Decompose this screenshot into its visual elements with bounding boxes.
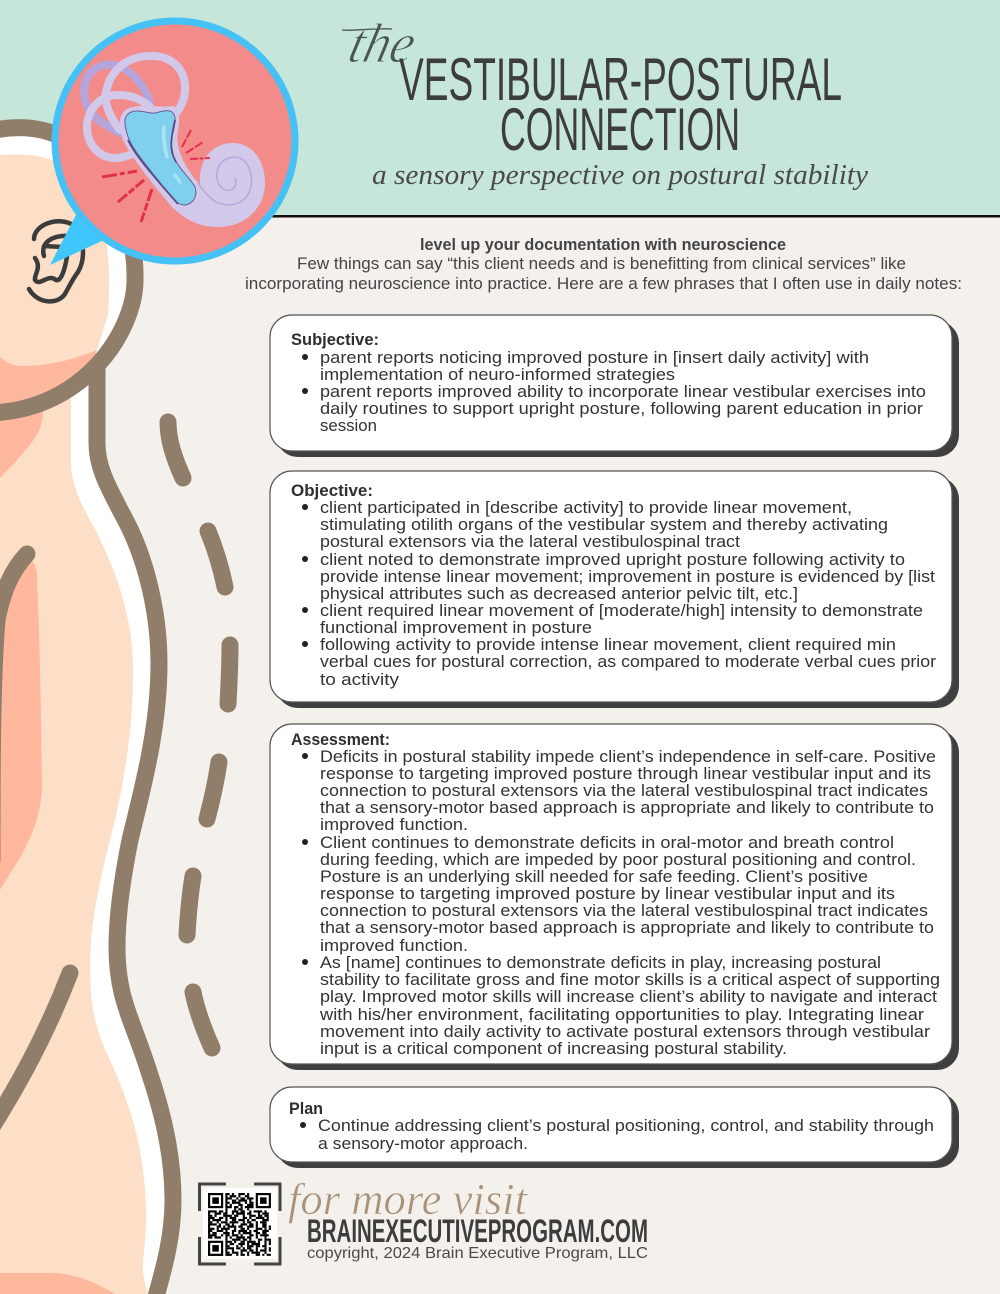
card [270, 724, 959, 1070]
QR code with bracket frame [200, 1184, 280, 1264]
vestibule fluid [125, 111, 196, 205]
panel: plan [270, 1087, 959, 1168]
panel: subjective [270, 315, 959, 457]
assessment bullets: Client continues to demonstrate deficits in oral-motor and breath control [320, 834, 894, 852]
plan heading: Plan [289, 1099, 323, 1118]
intro text: Few things can say “this client needs and is benefitting from clinical services” like [297, 254, 906, 273]
assessment bullets: connection to postural extensors via the lateral vestibulospinal tract indicates [320, 782, 928, 800]
plan bullet: a sensory-motor approach. [318, 1135, 528, 1153]
frame brackets [200, 1184, 280, 1264]
assessment bullets: As [name] continues to demonstrate deficits in play, increasing postural [320, 954, 881, 972]
title: script word the: the [343, 13, 422, 75]
torso contour line [97, 366, 173, 1294]
assessment bullets: response to targeting improved posture through linear vestibular input and its [320, 765, 931, 783]
copyright: copyright, 2024 Brain Executive Program, LLC [307, 1245, 648, 1262]
title: CONNECTION [500, 96, 740, 163]
assessment bullets [302, 748, 940, 1058]
objective bullets: following activity to provide intense linear movement, client required min [320, 636, 896, 654]
plan bullet: Continue addressing client’s postural positioning, control, and stability through [318, 1117, 934, 1135]
subjective bullets [302, 349, 926, 435]
body figure illustration [0, 128, 173, 1294]
objective bullets: client participated in [describe activity] to provide linear movement, [320, 499, 852, 517]
arm line [0, 554, 27, 860]
objective bullets: provide intense linear movement; improvement in posture is evidenced by [list [320, 568, 935, 586]
dashed spine line [168, 422, 230, 1048]
assessment bullets: input is a critical component of increasing postural stability. [320, 1040, 787, 1058]
assessment bullets: that a sensory-motor based approach is appropriate and likely to contribute to [320, 799, 934, 817]
objective heading: Objective: [291, 481, 373, 500]
subjective bullets: daily routines to support upright posture, following parent education in prior [320, 400, 924, 418]
assessment bullets: improved function. [320, 816, 468, 834]
objective bullets: to activity [320, 671, 400, 689]
panel: assessment [270, 724, 959, 1070]
website: BRAINEXECUTIVEPROGRAM.COM [307, 1213, 648, 1249]
subjective bullets: implementation of neuro-informed strategies [320, 366, 675, 384]
cochlea spiral [198, 157, 252, 205]
inner ear callout bubble [50, 21, 295, 265]
subjective bullets: session [320, 417, 377, 435]
torso skin [0, 390, 148, 1294]
objective bullets: client noted to demonstrate improved upright posture following activity to [320, 551, 905, 569]
assessment bullets: improved function. [320, 937, 468, 955]
intro text: level up your documentation with neuroscience [420, 235, 786, 254]
card [270, 1087, 959, 1168]
footer script: for more visit: for more visit [288, 1175, 529, 1224]
icon: ear [29, 221, 83, 301]
assessment heading: Assessment: [291, 730, 390, 749]
fluid highlight [164, 127, 180, 182]
subjective bullets: parent reports improved ability to incorporate linear vestibular exercises into [320, 383, 926, 401]
card [270, 315, 959, 457]
head skin [0, 154, 109, 400]
subjective bullets: parent reports noticing improved posture in [insert daily activity] with [320, 349, 869, 367]
red signal dashes [102, 130, 210, 222]
objective bullets: postural extensors via the lateral vestibulospinal tract [320, 533, 740, 551]
head outline [0, 128, 135, 413]
objective bullets [302, 499, 937, 689]
cochlea and vestibule [120, 106, 265, 227]
intro text [245, 235, 962, 293]
objective bullets: stimulating otilith organs of the vestibular system and thereby activating [320, 516, 888, 534]
subtitle: a sensory perspective on postural stability [372, 160, 869, 191]
panel: objective [270, 471, 959, 708]
objective bullets: physical attributes such as decreased anterior pelvic tilt, etc.] [320, 585, 798, 603]
objective bullets: verbal cues for postural correction, as compared to moderate verbal cues prior [320, 653, 937, 671]
assessment bullets: Posture is an underlying skill needed for safe feeding. Client’s positive [320, 868, 868, 886]
neck and torso white outline [0, 366, 173, 1294]
bubble tail [50, 213, 104, 265]
assessment bullets: stability to facilitate gross and fine motor skills is a critical aspect of supporting [320, 971, 940, 989]
head white outline [0, 128, 135, 413]
assessment bullets: that a sensory-motor based approach is appropriate and likely to contribute to [320, 919, 934, 937]
subjective heading: Subjective: [291, 330, 379, 349]
assessment bullets: Deficits in postural stability impede client’s independence in self-care. Positive [320, 748, 936, 766]
assessment bullets: with his/her environment, facilitating opportunities to play. Integrating linear [319, 1006, 925, 1024]
semicircular canals [84, 56, 185, 158]
intro text: incorporating neuroscience into practice. Here are a few phrases that I often use in daily notes: [245, 274, 962, 293]
QR modules [208, 1194, 271, 1255]
arm shadow [0, 560, 42, 890]
plan bullet [300, 1117, 934, 1153]
assessment bullets: connection to postural extensors via the lateral vestibulospinal tract indicates [320, 902, 928, 920]
hip shadow [0, 1273, 115, 1294]
assessment bullets: during feeding, which are impeded by poor postural positioning and control. [320, 851, 916, 869]
title [399, 46, 842, 163]
assessment bullets: play. Improved motor skills will increase client’s ability to navigate and interact [320, 988, 937, 1006]
header band [0, 0, 1000, 218]
bubble circle [55, 21, 295, 261]
card [270, 471, 959, 708]
assessment bullets: movement into daily activity to activate postural extensors through vestibular [320, 1023, 931, 1041]
objective bullets: functional improvement in posture [320, 619, 592, 637]
objective bullets: client required linear movement of [moderate/high] intensity to demonstrate [320, 602, 923, 620]
neck shadow [0, 350, 97, 478]
assessment bullets: response to targeting improved posture by linear vestibular input and its [320, 885, 895, 903]
fluid dark edge [128, 120, 178, 204]
waist line [0, 973, 70, 1130]
